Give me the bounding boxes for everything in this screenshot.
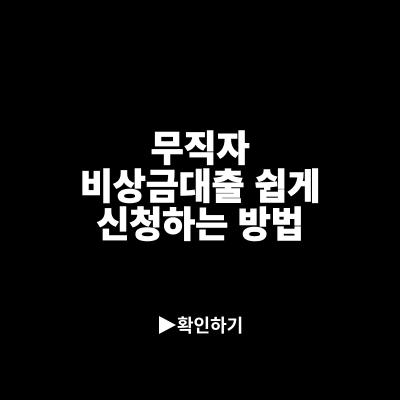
- title: 무직자: [151, 128, 249, 169]
- call to action text: 확인하기: [177, 316, 243, 336]
- title: [80, 128, 320, 245]
- icon: play triangle: [159, 316, 176, 334]
- title: 비상금대출 쉽게: [80, 166, 320, 207]
- title: 신청하는 방법: [96, 204, 304, 245]
- call to action: [159, 316, 243, 336]
